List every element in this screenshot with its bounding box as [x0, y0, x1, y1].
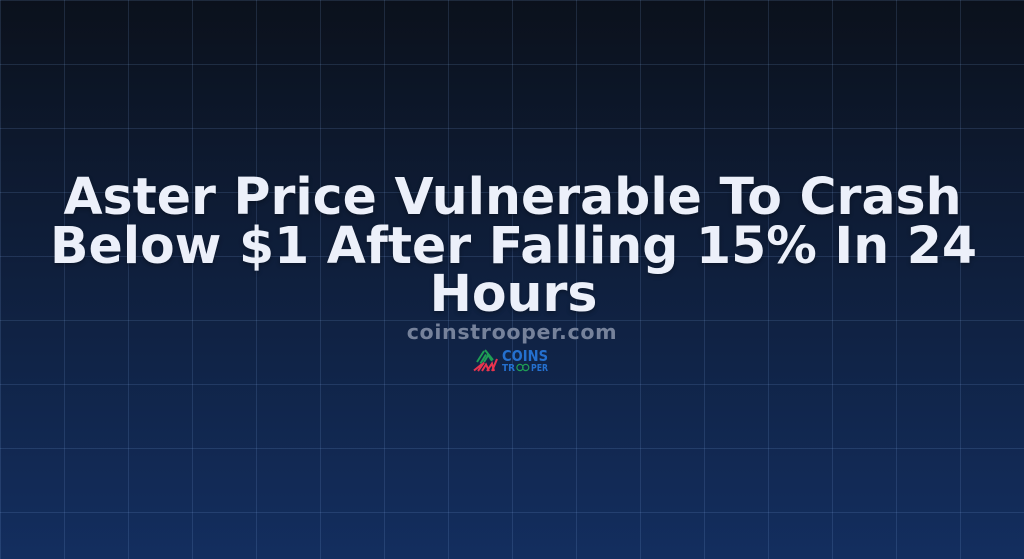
title [50, 167, 977, 323]
icon: coinstrooper logo [473, 347, 549, 374]
title: Aster Price Vulnerable To Crash [63, 167, 962, 226]
logo wordmark: PER [531, 363, 549, 374]
website label: coinstrooper.com [407, 320, 617, 344]
title: Hours [430, 264, 597, 323]
logo wordmark [502, 347, 549, 374]
logo mark [474, 350, 497, 371]
title: Below $1 After Falling 15% In 24 [50, 216, 977, 274]
logo wordmark: TR [502, 363, 516, 374]
